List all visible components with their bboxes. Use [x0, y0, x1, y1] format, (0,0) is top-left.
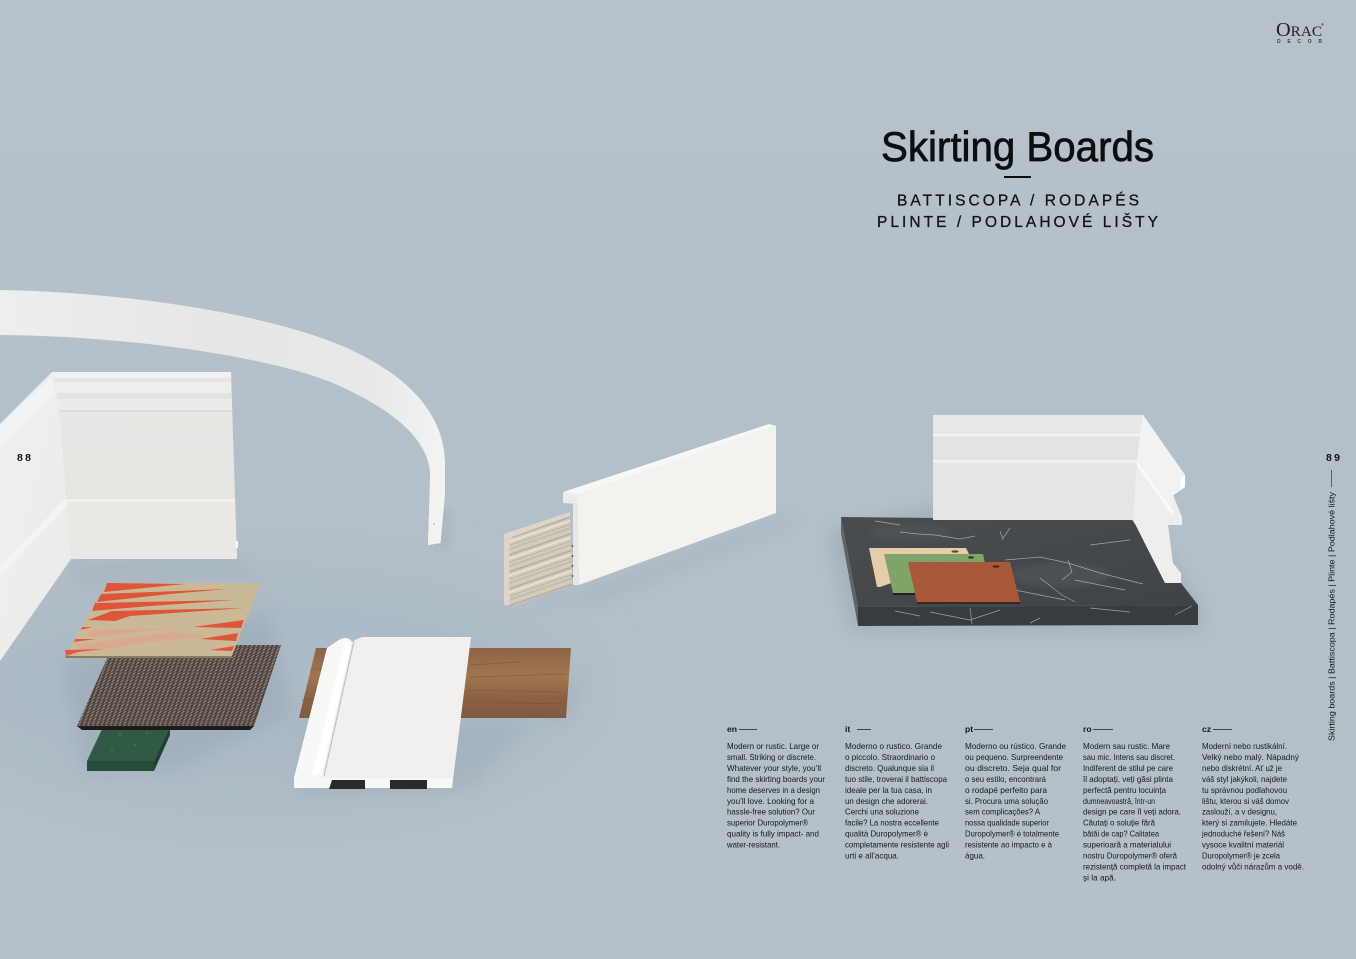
- text column: it: Cerchi una soluzione: [845, 806, 919, 816]
- text column: it: it: [845, 724, 850, 734]
- text column: it: tuo stile, troverai il battiscopa: [845, 774, 947, 784]
- text column: ro: bătăi de cap? Calitatea: [1083, 828, 1159, 838]
- product photo: white board over wood-effect profile: [504, 424, 796, 606]
- text column: cz: zaslouží, a v designu,: [1202, 806, 1277, 816]
- text column: pt: sem complicações? A: [965, 806, 1040, 816]
- text column: it: urti e all’acqua.: [845, 850, 899, 860]
- text column: en: [726, 724, 825, 850]
- text column: pt: Duropolymer® é totalmente: [965, 828, 1059, 838]
- text column: it: Moderno o rustico. Grande: [845, 741, 942, 751]
- text column: pt: resistente ao impacto e à: [965, 840, 1052, 850]
- text column: cz: jednoduché řešení? Náš: [1201, 828, 1285, 838]
- text column: cz: tu správnou podlahovou: [1202, 785, 1287, 795]
- text column: en: find the skirting boards your: [727, 774, 825, 784]
- text column: cz: vysoce kvalitní materiál: [1202, 840, 1284, 850]
- walnut wood sample: [299, 648, 571, 718]
- marble slab: [841, 517, 1198, 626]
- product photo: sample materials, wood and white profile: [60, 583, 585, 795]
- text column: ro: Indiferent de stilul pe care: [1083, 763, 1173, 773]
- page number: 88: 88: [17, 452, 31, 464]
- text column: ro: [1082, 724, 1187, 882]
- text column: pt: o seu estilo, encontrará: [965, 774, 1046, 784]
- text column: cz: Duropolymer® je zcela: [1202, 850, 1280, 860]
- logo: Orac Decor: DECOR: [1277, 39, 1322, 45]
- text column: cz: Velký nebo malý. Nápadný: [1202, 752, 1300, 762]
- brown tweed carpet sample: [77, 645, 281, 730]
- text column: en: superior Duropolymer®: [727, 818, 809, 828]
- product photo: tall white corner skirting board: [0, 372, 262, 661]
- back wall of skirting: [933, 415, 1143, 520]
- text column: it: ideale per la tua casa, in: [845, 785, 932, 795]
- text column: cz: cz: [1202, 724, 1211, 734]
- text column: en: Whatever your style, you’ll: [727, 763, 821, 773]
- text column: ro: dumneavoastră, într-un: [1083, 796, 1155, 806]
- text column: en: you’ll love. Looking for a: [727, 796, 814, 806]
- text column: pt: pt: [965, 724, 973, 734]
- text column: ro: design pe care îl veți adora.: [1083, 806, 1181, 816]
- text column: cz: který si zamilujete. Hledáte: [1202, 818, 1297, 828]
- text column: ro: nostru Duropolymer® oferă: [1083, 850, 1177, 860]
- text column: ro: ro: [1083, 724, 1092, 734]
- subtitle: translations: BATTISCOPA / RODAPÉS: [897, 192, 1139, 210]
- text column: cz: Moderní nebo rustikální.: [1202, 741, 1287, 751]
- text column: pt: si. Procura uma solução: [965, 796, 1048, 806]
- page number: 89: 89: [1326, 452, 1340, 464]
- text column: cz: odolný vůči nárazům a vodě.: [1202, 862, 1304, 872]
- text column: it: [845, 724, 949, 860]
- text column: pt: Moderno ou rústico. Grande: [965, 741, 1066, 751]
- text column: ro: perfectă pentru locuința: [1083, 785, 1166, 795]
- text column: it: un design che adorerai.: [845, 796, 928, 806]
- side wall of skirting: [1133, 415, 1185, 583]
- text column: ro: rezistență completă la impact: [1083, 862, 1187, 872]
- text column: ro: sau mic. Intens sau discret.: [1083, 752, 1175, 762]
- text column: ro: Modern sau rustic. Mare: [1083, 741, 1170, 751]
- text column: en: hassle-free solution? Our: [727, 806, 815, 816]
- text column: en: quality is fully impact- and: [727, 828, 819, 838]
- text column: it: o piccolo. Straordinario o: [845, 752, 935, 762]
- text column: en: small. Striking or discrete.: [727, 752, 816, 762]
- logo: Orac Decor: ®: [1321, 22, 1324, 27]
- text column: pt: ou discreto. Seja qual for: [965, 763, 1061, 773]
- text column: it: discreto. Qualunque sia il: [845, 763, 934, 773]
- product photo: wall corner skirting on marble slab: [828, 415, 1204, 632]
- logo: Orac Decor: ORAC: [1276, 19, 1322, 41]
- red and beige carpet sample: [65, 583, 260, 658]
- text column: it: completamente resistente agli: [845, 840, 949, 850]
- subtitle: translations: [877, 192, 1158, 231]
- product photo: curved flexible skirting strip: [0, 290, 452, 552]
- text column: pt: nossa qualidade superior: [965, 818, 1049, 828]
- text column: ro: și la apă.: [1083, 872, 1116, 882]
- text column: ro: îl adoptați, veți găsi plinta: [1082, 774, 1173, 784]
- text column: en: en: [727, 724, 737, 734]
- text column: ro: superioară a materialului: [1083, 840, 1171, 850]
- text column: cz: váš styl jakýkoli, najdete: [1202, 774, 1287, 784]
- text column: cz: nebo diskrétní. Ať už je: [1202, 763, 1282, 773]
- text column: pt: o rodapé perfeito para: [965, 785, 1047, 795]
- white hollow-backed skirting profile: [294, 637, 471, 789]
- text column: en: Modern or rustic. Large or: [727, 741, 819, 751]
- colour swatches: [869, 548, 1020, 604]
- text column: it: facile? La nostra eccellente: [845, 818, 939, 828]
- green sample block: [87, 727, 170, 771]
- text column: pt: [965, 724, 1066, 860]
- text column: ro: Căutați o soluție fără: [1083, 818, 1155, 828]
- side running head: Skirting boards | Battiscopa | Rodapés | Plinte | Podlahové lišty: [1326, 491, 1336, 741]
- text column: en: water-resistant.: [726, 840, 780, 850]
- text column: it: qualità Duropolymer® è: [845, 828, 928, 838]
- text column: cz: lištu, kterou si váš domov: [1202, 796, 1290, 806]
- title: Skirting Boards: [881, 123, 1154, 170]
- subtitle: translations: PLINTE / PODLAHOVÉ LIŠTY: [877, 214, 1158, 231]
- text column: cz: [1201, 724, 1304, 872]
- text column: pt: água.: [965, 850, 985, 860]
- text column: en: home deserves in a design: [727, 785, 820, 795]
- text column: pt: ou pequeno. Surpreendente: [965, 752, 1063, 762]
